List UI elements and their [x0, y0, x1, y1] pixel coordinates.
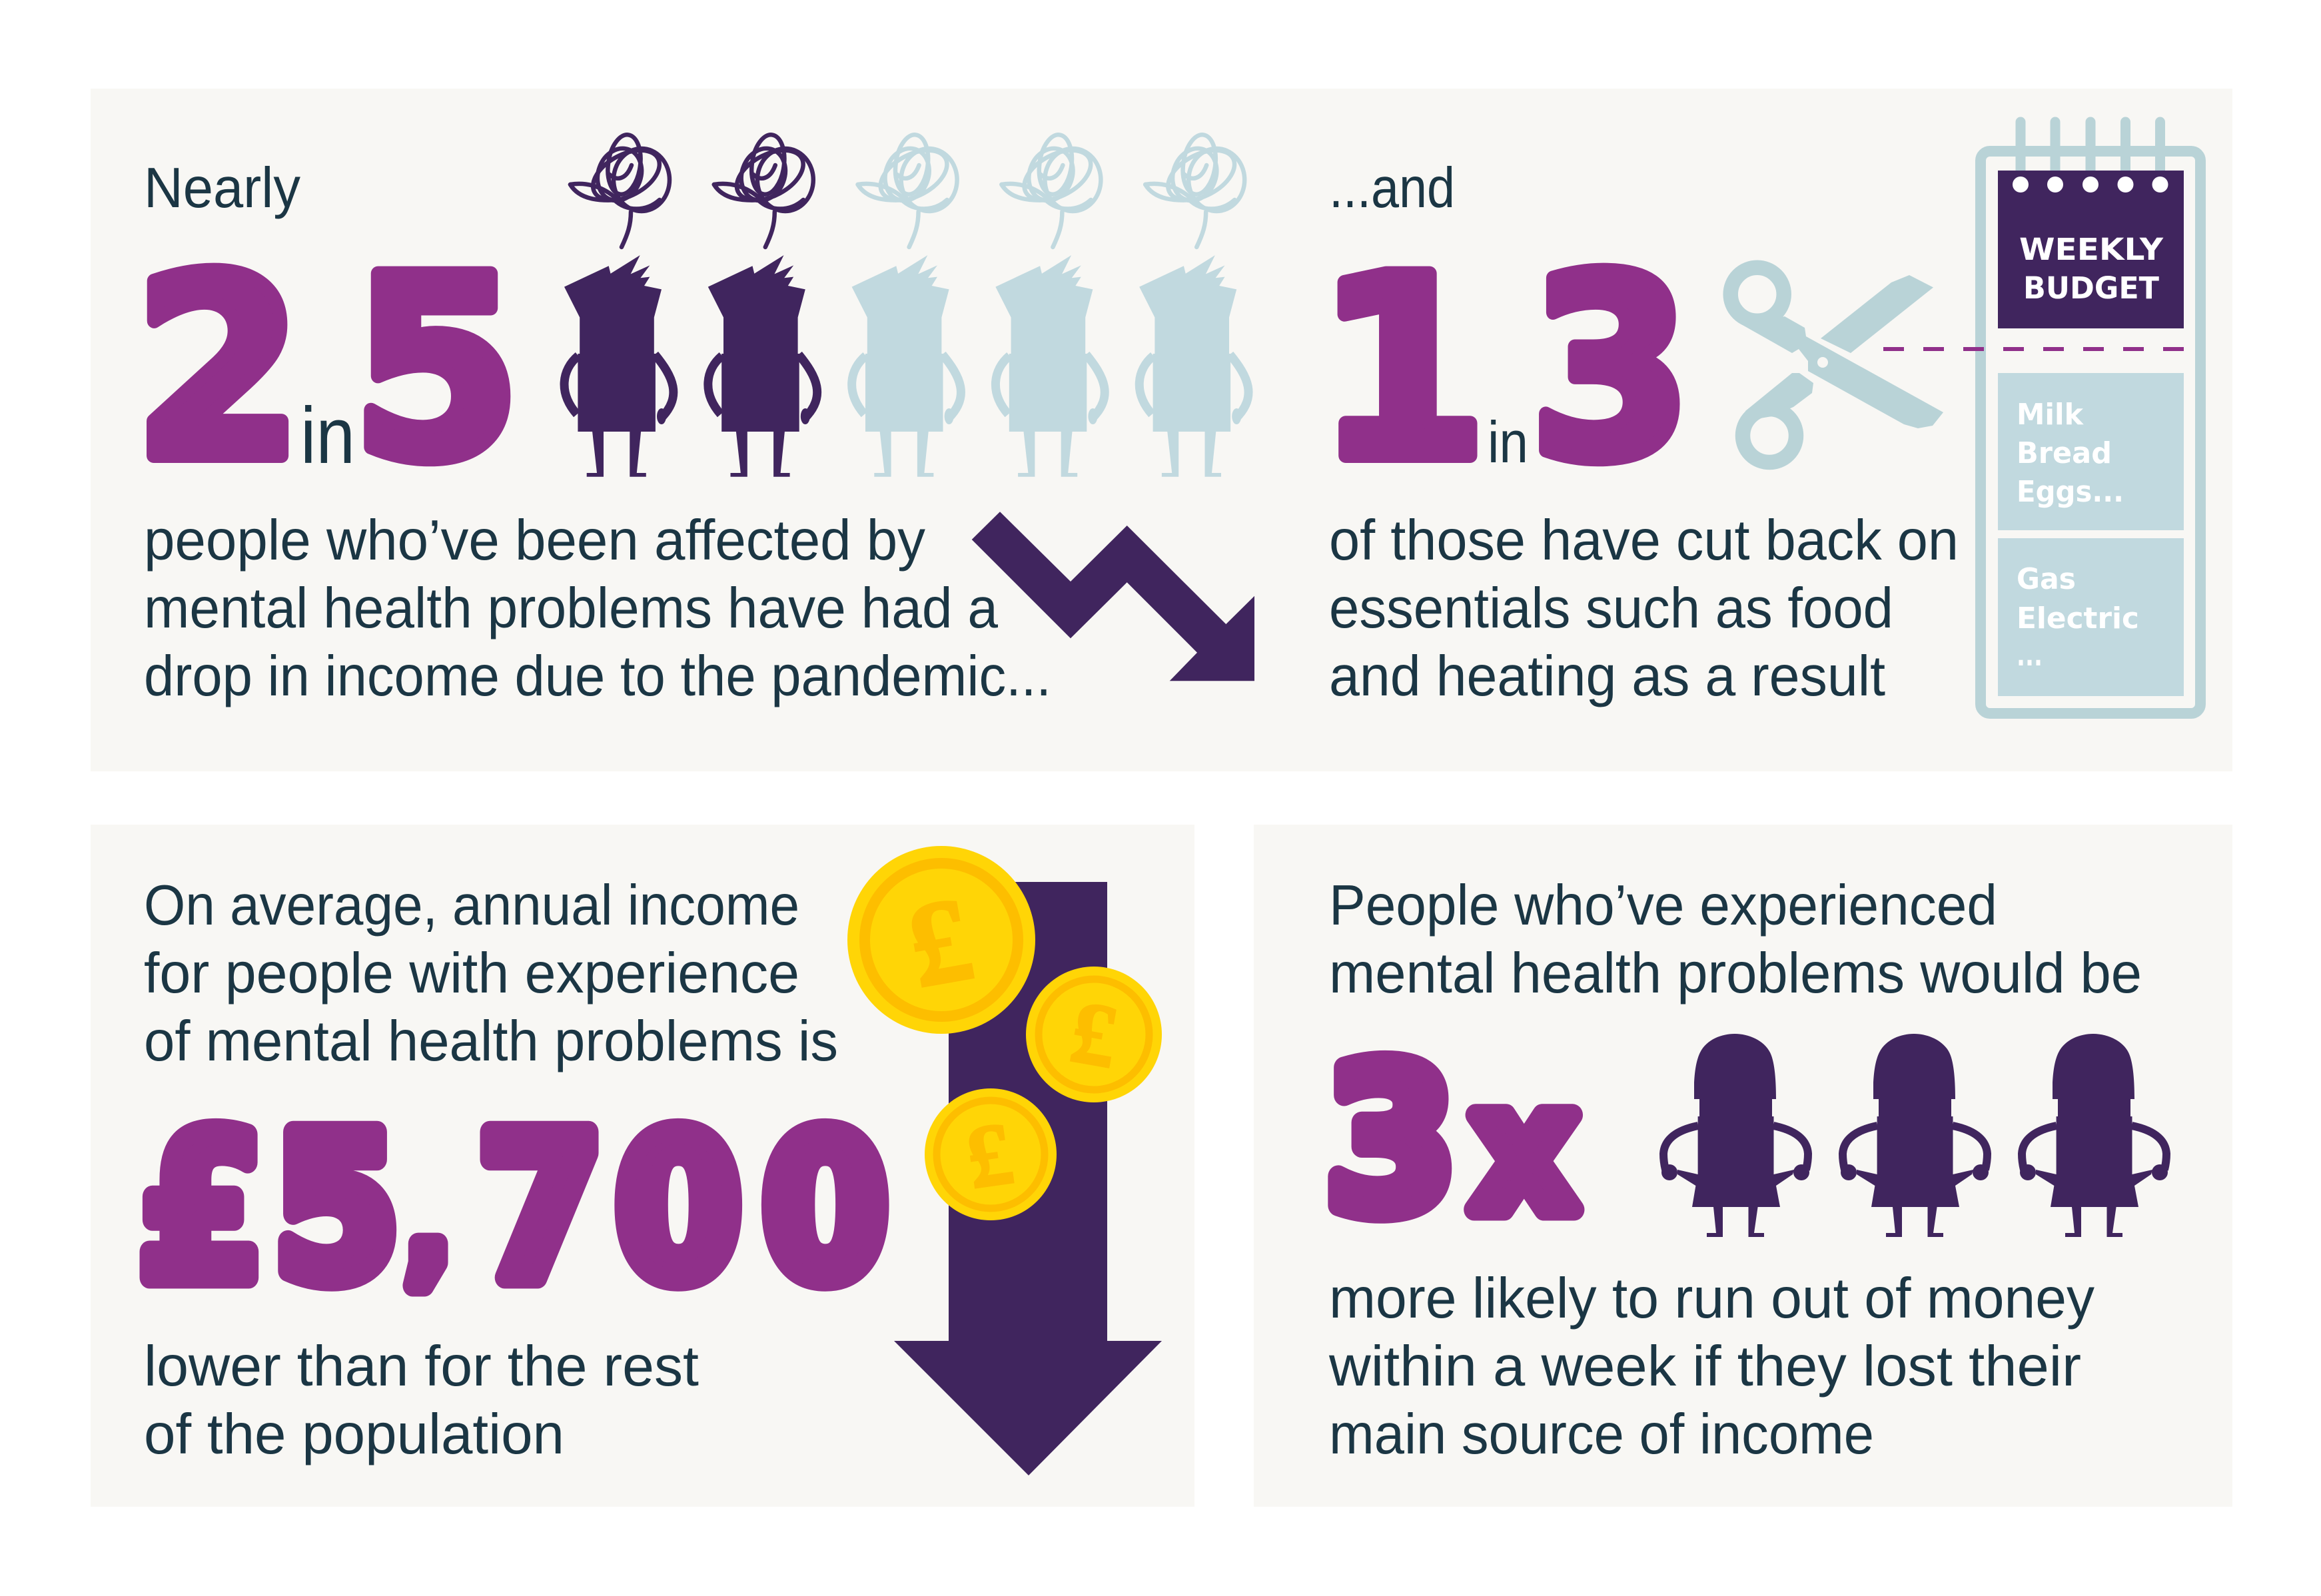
statistic: 1 in 3: 1 — [1317, 224, 1487, 515]
notepad holes — [2013, 177, 2168, 193]
cut line: dashed line from scissors — [1883, 347, 2184, 351]
text: Nearly: Nearly — [144, 157, 300, 220]
notepad binding rings — [2021, 122, 2160, 175]
icon: large pound coin — [847, 846, 1035, 1034]
text: lower than the rest: lower than for the rest — [144, 1335, 699, 1398]
panel: top panel, income drop and essentials — [91, 89, 2232, 771]
budget section: food: Bread — [2017, 436, 2112, 470]
heading: weekly budget: BUDGET — [2023, 270, 2159, 306]
heading: weekly budget: WEEKLY — [2019, 232, 2164, 267]
budget section: food: Eggs... — [2017, 475, 2124, 509]
notepad header — [1998, 171, 2184, 328]
icon: person 2 with scribble — [708, 133, 817, 477]
statistic: 1 in 3: 3 — [1530, 224, 1691, 515]
text: more likely to run out of money: within a week if they lost their — [1328, 1335, 2081, 1398]
budget section: energy: ... — [2017, 639, 2043, 673]
icon: person 5 with scribble — [1139, 133, 1248, 477]
icon: person 3 with scribble — [852, 133, 961, 477]
icon: small pound coin — [925, 1088, 1057, 1220]
statistic: £5,700: , — [406, 1150, 450, 1298]
icon: weekly budget notepad — [1981, 122, 2200, 713]
statistic: 2 in 5: in — [300, 391, 355, 480]
icon: scissors — [1731, 268, 1943, 462]
text: cut back on essentials — [1329, 509, 1959, 708]
text: average annual income — [144, 874, 838, 1073]
statistic: 3x: x — [1472, 1049, 1577, 1251]
text: more likely to run out of money: main source of income — [1329, 1403, 1874, 1466]
budget section: energy — [1998, 538, 2184, 696]
icon: woman 1 — [1661, 1034, 1809, 1237]
icon: person 4 with scribble — [995, 133, 1105, 477]
text: people who have experienced: mental health problems would be — [1329, 942, 2142, 1005]
text: more likely to run out of money: more likely to run out of money — [1329, 1267, 2094, 1330]
heading: weekly budget — [2019, 232, 2164, 306]
icon group: three women with empty pockets — [1661, 1034, 2168, 1237]
text: people affected by drop in income: drop in income due to the pandemic... — [144, 645, 1051, 708]
icon: woman 3 — [2020, 1034, 2168, 1237]
statistic: 2 in 5: 2 — [135, 224, 302, 515]
statistic: 1 in 3: in — [1488, 409, 1528, 475]
statistic: 3x: 3 — [1326, 1024, 1456, 1257]
icon: medium pound coin: £ — [1064, 982, 1125, 1086]
panel: bottom left, annual income — [91, 825, 1194, 1507]
text: people who have experienced: People who’ve experienced — [1329, 874, 1997, 937]
statistic: 2 in 5 — [135, 224, 520, 515]
statistic: 2 in 5: 5 — [352, 224, 520, 515]
text: average annual income: for people with experience — [144, 942, 799, 1005]
statistic: £5,700: £5 — [139, 1092, 399, 1325]
text: cut back on essentials: and heating as a result — [1329, 645, 1885, 708]
icon: large pound coin: £ — [899, 872, 981, 1012]
icon group: five people with tangled thoughts, two highlighted — [564, 133, 1248, 477]
text: people affected by drop in income: people who’ve been affected by — [144, 509, 925, 572]
icon: medium pound coin — [1026, 967, 1162, 1102]
statistic: £5,700: 700 — [478, 1092, 888, 1325]
budget section: energy: Electric — [2017, 601, 2139, 635]
statistic: 1 in 3 — [1317, 224, 1691, 515]
text: cut back on essentials: of those have cut back on — [1329, 509, 1959, 572]
text: people who have experienced — [1329, 874, 2142, 1005]
budget section: food — [1998, 373, 2184, 530]
icon: small pound coin: £ — [961, 1103, 1019, 1207]
text: average annual income: of mental health problems is — [144, 1010, 838, 1073]
budget section: food: Milk — [2017, 398, 2085, 432]
text: people affected by drop in income — [144, 509, 1051, 708]
icon: woman 2 — [1841, 1034, 1989, 1237]
text: average annual income: On average, annual income — [144, 874, 799, 937]
text: cut back on essentials: essentials such as food — [1329, 577, 1893, 640]
icon: person 1 with scribble — [564, 133, 674, 477]
panel: bottom right, running out of money — [1254, 825, 2232, 1507]
arrow: zigzag falling arrow — [972, 512, 1254, 681]
arrow: large down arrow — [894, 882, 1162, 1475]
text: lower than the rest: of the population — [144, 1403, 564, 1466]
text: people affected by drop in income: mental health problems have had a — [144, 577, 999, 640]
text: more likely to run out of money — [1328, 1267, 2094, 1466]
text: ...and: ...and — [1329, 157, 1455, 220]
budget section: energy: Gas — [2017, 562, 2076, 596]
text: lower than the rest — [144, 1335, 699, 1466]
